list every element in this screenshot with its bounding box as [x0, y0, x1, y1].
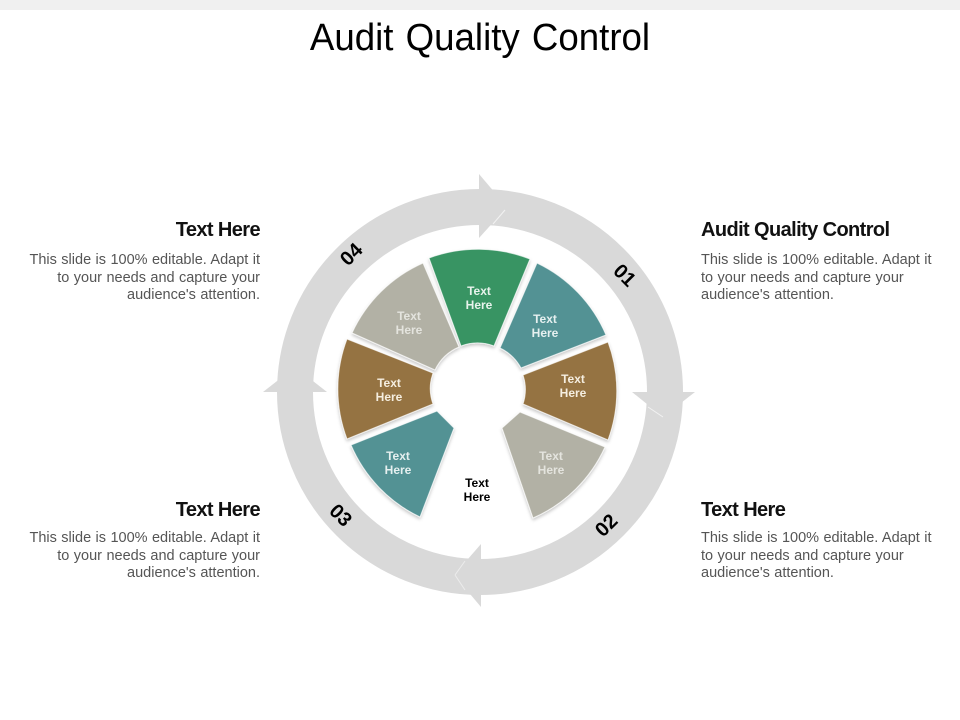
ring numbers [325, 238, 640, 541]
label: grey upper left: Here [396, 323, 423, 337]
arrow: bottom [454, 544, 481, 607]
text block: bottom right: This slide is 100% editable. Adapt it to your needs and capture your audience's attention. [701, 530, 932, 581]
text block: top left: This slide is 100% editable. Adapt it to your needs and capture your audience's attention. [29, 252, 260, 303]
label: green: Text [467, 284, 491, 298]
label: brown left: Text [377, 376, 401, 390]
number 04: 04 [336, 238, 368, 270]
text block: bottom left: Text Here [176, 499, 260, 521]
label: brown right: Here [560, 386, 587, 400]
petals [338, 249, 617, 518]
label: teal lower left: Here [385, 463, 412, 477]
label: grey lower right: Text [539, 449, 563, 463]
text block: top left: Text Here [176, 219, 260, 241]
petal: grey upper left [352, 263, 459, 370]
text block: top right: This slide is 100% editable. Adapt it to your needs and capture your audience's attention. [701, 252, 932, 303]
text block: top right [701, 219, 932, 303]
petal: brown right [523, 342, 617, 440]
text block: bottom right: Text Here [701, 499, 785, 521]
label: center bottom: Text [465, 476, 489, 490]
text block: bottom right [701, 499, 932, 581]
text block: bottom left [29, 499, 260, 581]
label: grey upper left: Text [397, 309, 421, 323]
label: brown left: Here [376, 390, 403, 404]
arrow: right [632, 392, 695, 417]
petal: teal lower left [351, 411, 454, 517]
label: teal lower left: Text [386, 449, 410, 463]
text block: top left [29, 219, 260, 303]
arrow: left [263, 367, 327, 392]
title: Audit Quality Control [310, 17, 650, 59]
label: brown right: Text [561, 372, 585, 386]
petal: teal upper right [500, 263, 606, 368]
text block: bottom left: This slide is 100% editable. Adapt it to your needs and capture your audience's attention. [29, 530, 260, 581]
number 02: 02 [591, 510, 622, 541]
circular arrow ring [263, 174, 695, 607]
label: grey lower right: Here [538, 463, 565, 477]
label: teal upper right: Here [532, 326, 559, 340]
petal: green top [429, 249, 530, 346]
label: green: Here [466, 298, 493, 312]
number 01: 01 [609, 260, 640, 291]
label: center bottom: Here [464, 490, 491, 504]
arrow: top [479, 174, 507, 238]
petal: grey lower right [502, 412, 605, 518]
number 03: 03 [325, 500, 356, 531]
text block: top right: Audit Quality Control [701, 219, 890, 241]
petal labels [376, 284, 587, 504]
label: teal upper right: Text [533, 312, 557, 326]
petal: brown left [338, 339, 433, 439]
